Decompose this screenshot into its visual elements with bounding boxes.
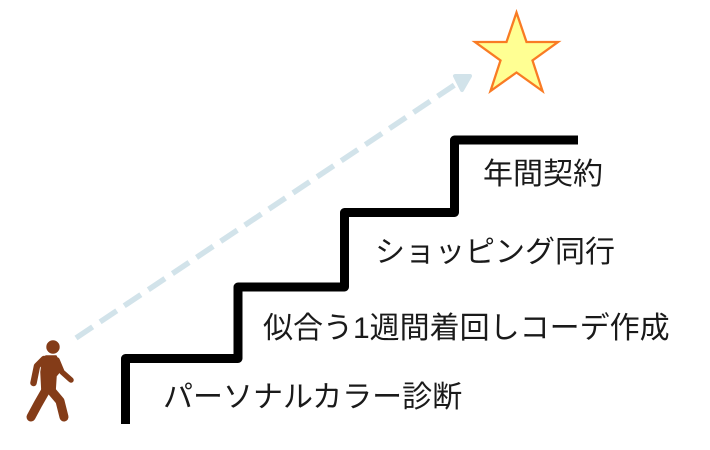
step label: weekly outfit plan: 似合う1週間着回しコーデ作成 <box>263 312 670 345</box>
step label: personal colour diagnosis: パーソナルカラー診断 <box>163 381 462 414</box>
icon: goal star <box>475 12 558 91</box>
staircase line <box>126 140 578 424</box>
step label: shopping accompaniment: ショッピング同行 <box>375 236 615 269</box>
step label: annual contract: 年間契約 <box>483 158 603 191</box>
icon: walking person <box>31 340 71 417</box>
dashed arrow toward goal <box>76 76 470 338</box>
